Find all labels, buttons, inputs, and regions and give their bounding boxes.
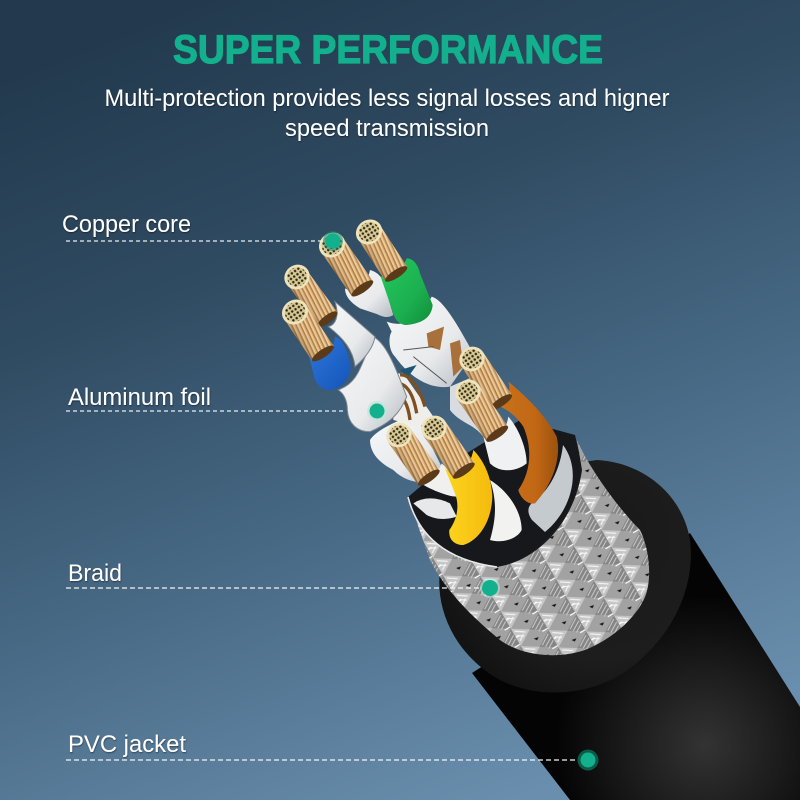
- yellow insulator: [445, 450, 492, 545]
- jacket end face: [439, 460, 691, 692]
- PVC jacket body: [472, 533, 800, 800]
- foil striped centre: [393, 373, 433, 427]
- white tube core 6: [483, 417, 527, 470]
- cores drawn in zoom coordinates: [308, 258, 558, 545]
- braid opening: [408, 420, 582, 567]
- callout: aluminum foil: Aluminum foil: [68, 384, 211, 411]
- callout: pvc jacket: PVC jacket: [68, 731, 186, 758]
- callout: aluminum foil: [66, 384, 387, 421]
- foil creases: [400, 327, 463, 383]
- green insulator: [381, 258, 433, 325]
- copper wire 3: [279, 260, 340, 330]
- copper wire 5: [455, 342, 514, 413]
- braid rim: [408, 497, 497, 567]
- white tube behind yellow: [490, 480, 522, 541]
- blue insulator: [308, 337, 351, 390]
- callout: pvc jacket: [66, 731, 598, 770]
- copper wire 1: [314, 227, 376, 299]
- foil centre: [387, 297, 473, 387]
- cable illustration: [277, 215, 800, 800]
- subtitle: [104, 85, 670, 142]
- braid shield: [408, 440, 649, 655]
- copper wire 4: [277, 295, 336, 364]
- subtitle: speed transmission: [285, 115, 489, 142]
- callout: copper core: Copper core: [62, 211, 191, 238]
- white tube core 3: [328, 302, 375, 367]
- callout: braid: Braid: [68, 560, 122, 587]
- foil bottom left: [413, 498, 457, 519]
- subtitle: Multi-protection provides less signal losses and higner: [104, 85, 670, 112]
- white tube core 1: [345, 270, 393, 317]
- copper wire 8: [381, 418, 442, 488]
- orange insulator: [500, 382, 558, 504]
- foil left: [338, 337, 407, 432]
- foil lower left: [370, 420, 447, 482]
- copper wire 2: [351, 215, 410, 285]
- inner silver foil: [528, 445, 573, 532]
- title: SUPER PERFORMANCE: [173, 28, 603, 72]
- copper wire 7: [416, 411, 477, 481]
- white tube core 8: [417, 463, 457, 497]
- copper wire 6: [450, 375, 510, 445]
- foil right: [450, 377, 488, 437]
- callout: braid: [66, 560, 500, 598]
- callout: copper core: [62, 211, 343, 251]
